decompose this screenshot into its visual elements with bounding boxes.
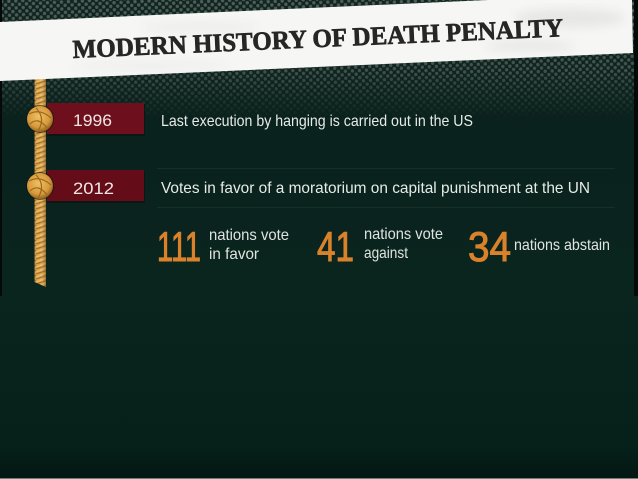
stat: 41 against: [317, 223, 443, 270]
stat: 41 against: against: [364, 245, 408, 262]
year label 1996: [47, 103, 145, 136]
stat: 111 in favor: 111: [157, 223, 201, 270]
event text 1996: Last execution by hanging is carried out in the US: [161, 113, 473, 130]
year label 1996: 1996: [73, 111, 112, 130]
stat: 34 abstain: [468, 223, 610, 270]
stat: 111 in favor: in favor: [209, 246, 260, 263]
timeline row 1996: [26, 103, 473, 136]
year label 2012: [47, 170, 145, 203]
event text 2012: Votes in favor of a moratorium on capital punishment at the UN: [161, 180, 590, 197]
stat: 41 against: nations vote: [364, 226, 443, 243]
paper creases: [498, 8, 620, 50]
knot 1: [26, 105, 54, 133]
halftone texture band: [2, 0, 634, 110]
knot 2: [26, 172, 54, 200]
title banner: [0, 0, 633, 81]
year label 2012: 2012: [73, 179, 114, 198]
side edge strips: [0, 0, 638, 296]
stat: 111 in favor: [157, 223, 289, 270]
stat: 34 abstain: 34: [468, 223, 511, 270]
bottom edge line: [0, 478, 638, 479]
title text: MODERN HISTORY OF DEATH PENALTY: [72, 13, 564, 64]
timeline row 2012: [26, 168, 615, 208]
stat: 41 against: 41: [317, 223, 354, 270]
stat: 111 in favor: nations vote: [209, 227, 289, 244]
rope: [34, 78, 46, 287]
stat: 34 abstain: nations abstain: [514, 237, 610, 254]
